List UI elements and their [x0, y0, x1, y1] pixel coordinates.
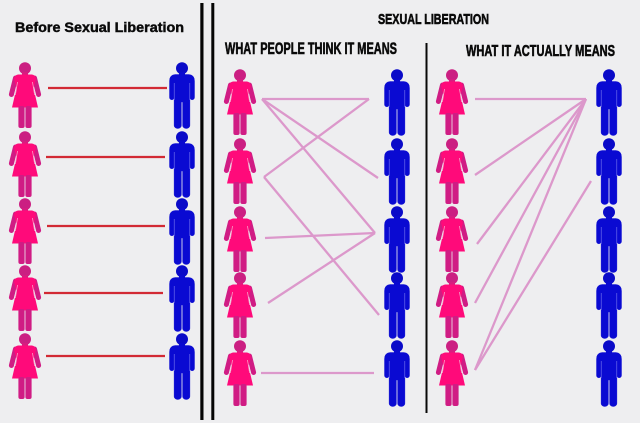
men column — [384, 69, 410, 407]
vertical divider between sub-panels — [426, 43, 428, 413]
men column — [596, 69, 622, 407]
panel: what it actually means — [438, 43, 622, 407]
men column — [170, 62, 194, 400]
heading: sexual liberation: SEXUAL LIBERATION — [378, 11, 489, 28]
panel: what people think it means — [225, 40, 410, 407]
subheading: what people think it means: WHAT PEOPLE THINK IT MEANS — [225, 40, 397, 58]
women column — [438, 69, 466, 406]
double vertical divider — [200, 3, 214, 420]
heading: before sexual liberation: Before Sexual Liberation — [15, 19, 184, 35]
women column — [226, 69, 254, 406]
red one-to-one connecting lines — [44, 88, 167, 356]
panel: before sexual liberation — [11, 19, 195, 400]
pink crossing lines — [261, 99, 379, 373]
women column — [11, 62, 39, 399]
pink lines converging on one man — [475, 99, 591, 370]
